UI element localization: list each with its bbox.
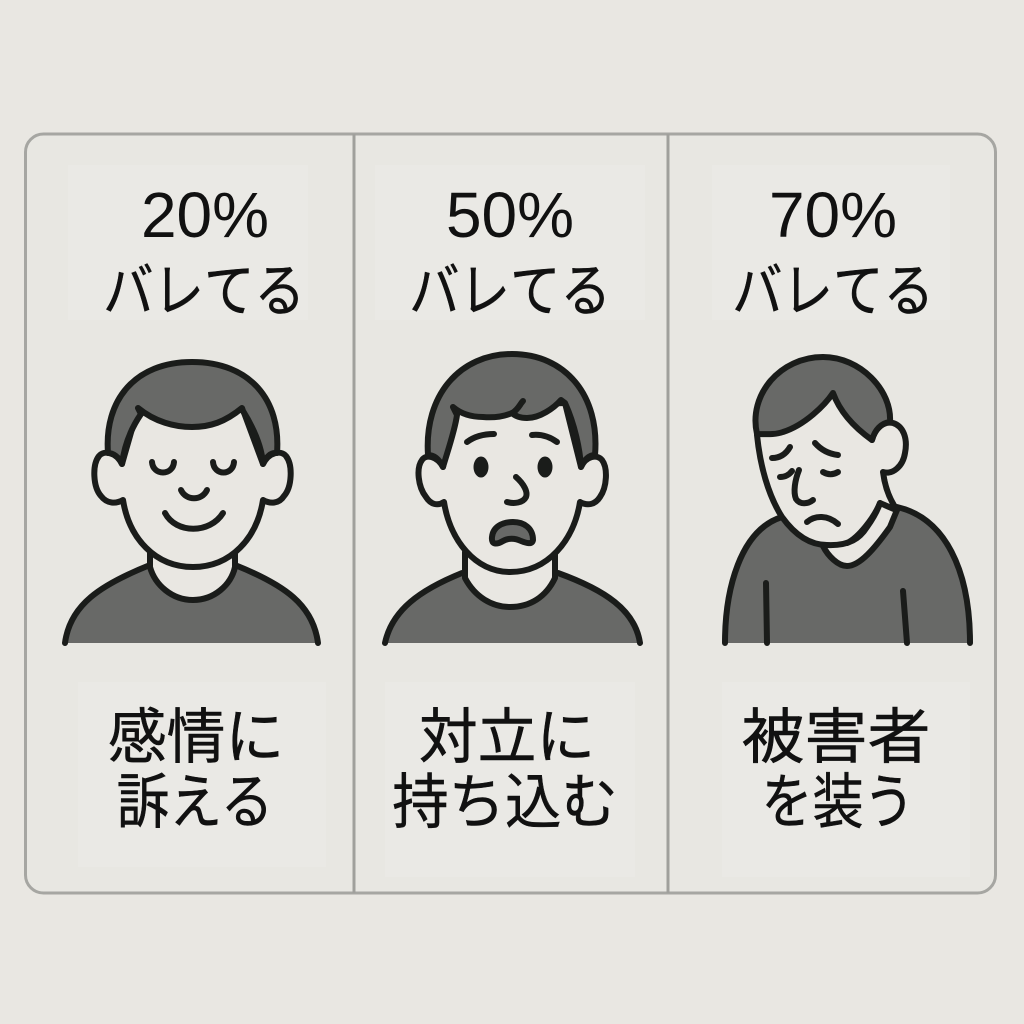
label: 対立に持ち込む <box>385 682 635 877</box>
icon: calm smiling man <box>65 362 318 643</box>
heading: 20%: バレてる <box>103 259 305 324</box>
heading: 50% <box>375 165 645 324</box>
label: 対立に持ち込む: 対立に <box>419 703 595 771</box>
heading: 70%: 70% <box>769 179 897 251</box>
label: 被害者を装う: 被害者 <box>742 704 930 772</box>
panel: three-column frame <box>26 134 996 893</box>
icon: worried man <box>385 354 640 643</box>
heading: 20% <box>68 165 308 324</box>
heading: 50%: バレてる <box>409 259 611 324</box>
heading: 70% <box>712 165 950 324</box>
heading: 50%: 50% <box>446 179 574 251</box>
label: 感情に訴える: 感情に <box>108 703 284 771</box>
label: 感情に訴える: 訴える <box>117 769 273 836</box>
icon: dejected man <box>725 357 970 643</box>
heading: 20%: 20% <box>141 179 269 251</box>
heading: 70%: バレてる <box>732 259 934 324</box>
panel: column 2 <box>375 165 645 877</box>
panel: column 1 <box>65 165 326 867</box>
label: 被害者を装う: を装う <box>762 769 914 836</box>
panel: column 3 <box>712 165 970 877</box>
label: 被害者を装う <box>722 682 970 877</box>
label: 感情に訴える <box>78 682 326 867</box>
label: 対立に持ち込む: 持ち込む <box>392 769 618 836</box>
